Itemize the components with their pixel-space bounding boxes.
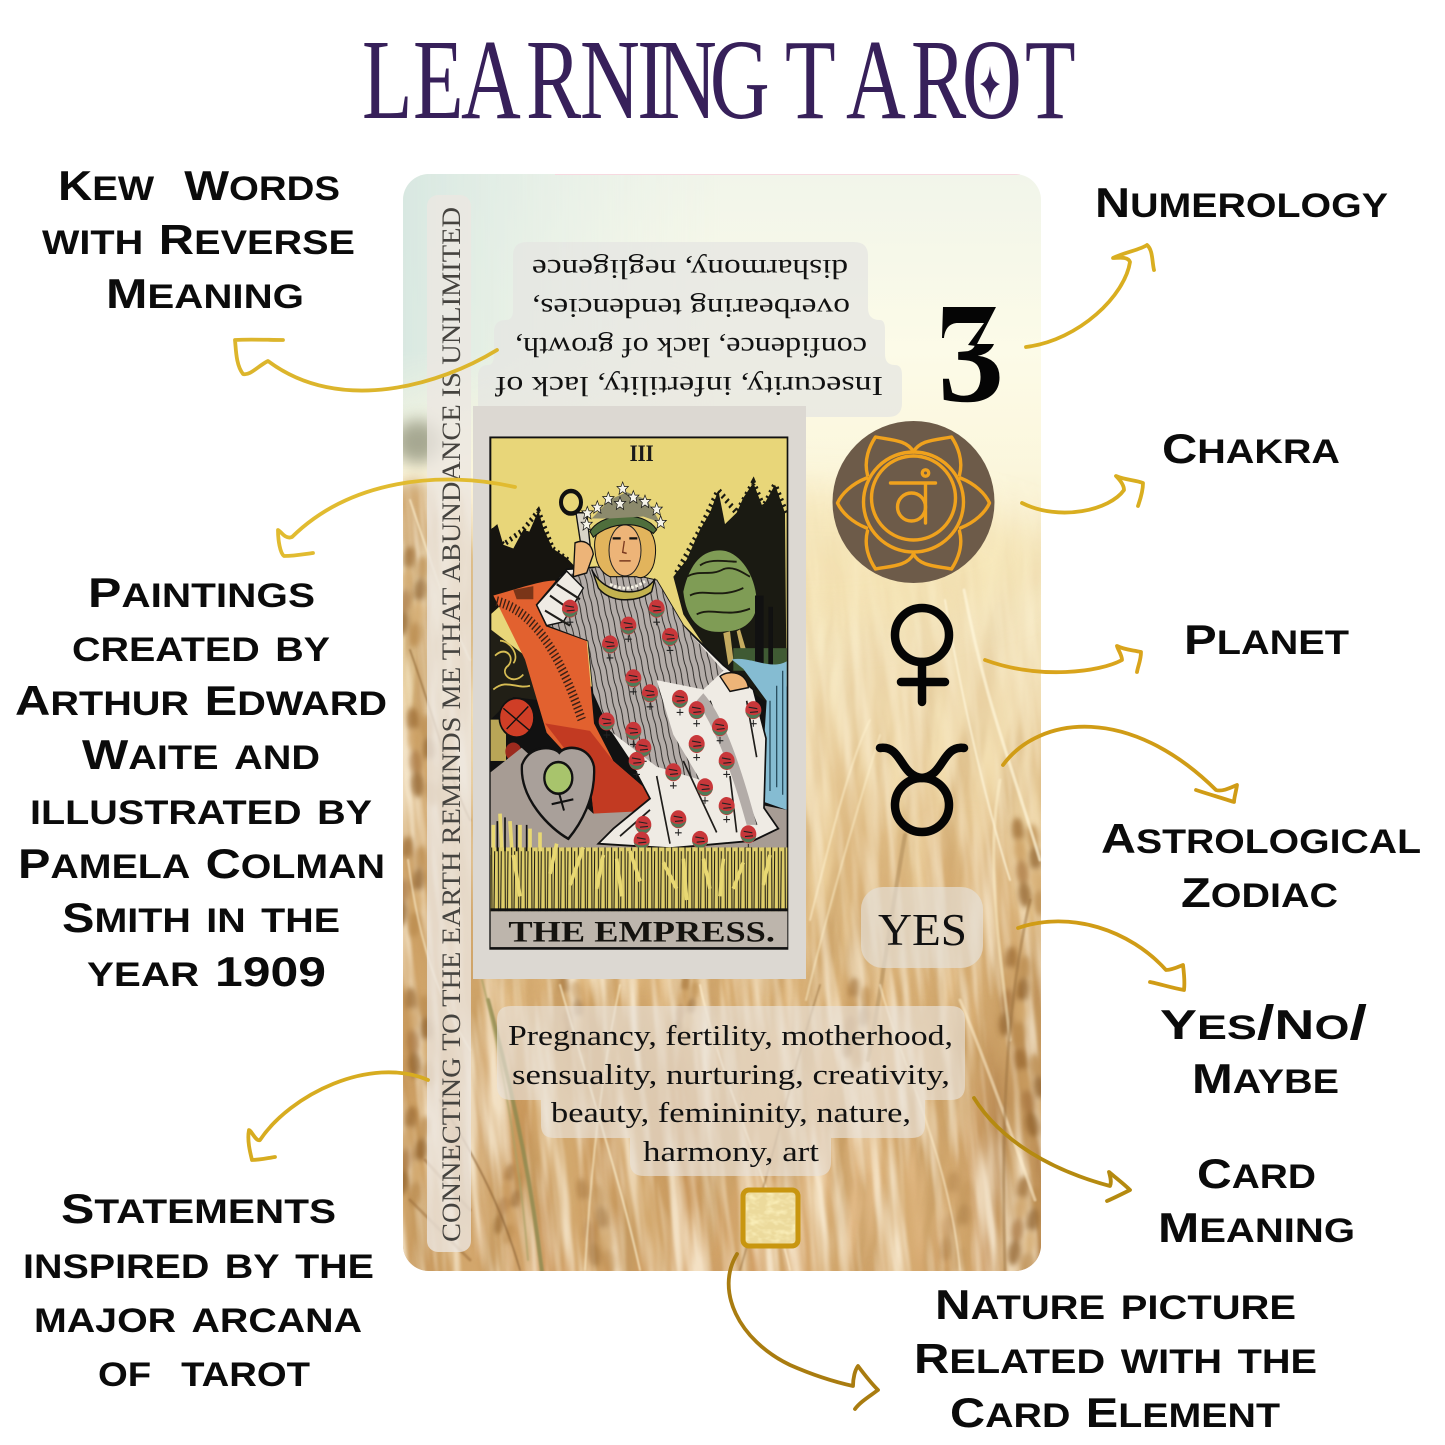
painting: The Empress: THE EMPRESS. bbox=[508, 915, 775, 948]
reversed keywords box: disharmony, negligence bbox=[532, 254, 848, 284]
label: statements: major arcana bbox=[34, 1290, 362, 1343]
yes/no answer box bbox=[861, 887, 983, 968]
arrow: astrological zodiac bbox=[1003, 727, 1237, 802]
label: statements bbox=[23, 1181, 374, 1397]
label: astrological zodiac bbox=[1101, 811, 1421, 918]
arrow: chakra bbox=[1022, 476, 1143, 513]
icon: numerology number 3 bbox=[942, 307, 1000, 402]
label: nature picture bbox=[914, 1277, 1317, 1438]
reversed keywords box bbox=[478, 242, 902, 417]
robe bbox=[537, 567, 778, 848]
throne bbox=[490, 630, 537, 719]
label: yes no maybe: Yes/ No/ bbox=[1160, 997, 1367, 1050]
label: key words: Meaning bbox=[106, 266, 304, 319]
label: statements: Statements bbox=[61, 1181, 336, 1234]
label: nature picture: Card Element bbox=[950, 1385, 1280, 1438]
label: paintings: Paintings bbox=[88, 565, 315, 618]
label: yes no maybe bbox=[1160, 997, 1367, 1104]
icon: numerology number 3: 3 bbox=[938, 283, 1004, 430]
label: card meaning bbox=[1158, 1146, 1355, 1253]
robe flowers bbox=[642, 684, 658, 710]
label: paintings: created by bbox=[72, 619, 330, 672]
painting: The Empress: III bbox=[630, 440, 654, 466]
label: astrological zodiac: Astrological bbox=[1101, 811, 1421, 864]
label: paintings: Pamela Colman bbox=[18, 836, 385, 889]
label: paintings: Arthur Edward bbox=[15, 673, 387, 726]
label: astrological zodiac: Zodiac bbox=[1181, 865, 1338, 918]
card meaning box: harmony, art bbox=[643, 1136, 819, 1168]
reversed keywords box: overbearing tendencies, bbox=[532, 293, 850, 323]
wheat bbox=[491, 847, 787, 911]
arrow: key words bbox=[235, 340, 497, 391]
crown bbox=[590, 516, 657, 537]
wheat ears bbox=[393, 546, 1056, 1278]
reversed keywords box: confidence, lack of growth, bbox=[515, 332, 867, 362]
yes/no answer box: YES bbox=[878, 905, 967, 955]
arrow: numerology bbox=[1026, 245, 1154, 347]
painting: The Empress bbox=[489, 436, 788, 950]
label: key words: Kew Words bbox=[58, 158, 340, 211]
label: paintings: illustrated by bbox=[30, 782, 372, 835]
label: paintings bbox=[15, 565, 387, 997]
label: nature picture: Nature picture bbox=[935, 1277, 1296, 1330]
icon: Taurus zodiac bbox=[880, 748, 964, 832]
panel: tarot reference card bbox=[403, 174, 1041, 1271]
label: chakra: Chakra bbox=[1162, 421, 1340, 474]
icon: sacral chakra bbox=[832, 421, 994, 583]
label: planet: Planet bbox=[1184, 612, 1349, 665]
label: key words bbox=[42, 158, 355, 319]
sceptre and hand bbox=[576, 513, 591, 550]
arrow: planet bbox=[985, 646, 1141, 672]
arrow: nature picture bbox=[729, 1254, 878, 1409]
card meaning box: beauty, femininity, nature, bbox=[551, 1097, 911, 1129]
statement text strip: CONNECTING TO THE EARTH REMINDS ME THAT ABUNDANCE IS UNLIMITED bbox=[437, 207, 466, 1242]
trees bbox=[491, 512, 574, 614]
label: card meaning: Meaning bbox=[1158, 1200, 1355, 1253]
label: key words: with Reverse bbox=[42, 212, 355, 265]
reversed keywords box: Insecurity, infertility, lack of bbox=[495, 371, 883, 401]
card meaning box: Pregnancy, fertility, motherhood, bbox=[508, 1020, 953, 1052]
label: paintings: year 1909 bbox=[87, 944, 326, 997]
arrow: statements bbox=[248, 1072, 428, 1160]
card caption bbox=[491, 911, 787, 947]
arrow: paintings bbox=[278, 480, 515, 556]
arrow: card meaning bbox=[974, 1098, 1130, 1201]
arrow: yes no maybe bbox=[1018, 921, 1184, 990]
label: statements: of tarot bbox=[98, 1344, 310, 1397]
label: card meaning: Card bbox=[1197, 1146, 1316, 1199]
label: yes no maybe: Maybe bbox=[1192, 1051, 1339, 1104]
element gold square bbox=[743, 1190, 798, 1246]
statement text strip bbox=[427, 195, 471, 1252]
ground and shield bbox=[491, 748, 787, 866]
card meaning box bbox=[497, 1006, 965, 1176]
title: LEARNING TAROT bbox=[362, 16, 1076, 143]
icon: Venus planet bbox=[895, 608, 949, 702]
card meaning box: sensuality, nurturing, creativity, bbox=[512, 1059, 950, 1091]
card frame bbox=[473, 406, 806, 979]
label: paintings: Waite and bbox=[82, 727, 320, 780]
label: paintings: Smith in the bbox=[62, 890, 340, 943]
queen head bbox=[595, 518, 656, 578]
label: nature picture: Related with the bbox=[914, 1331, 1317, 1384]
label: statements: inspired by the bbox=[23, 1236, 374, 1289]
label: numerology: Numerology bbox=[1095, 175, 1388, 228]
nature picture: wheat field background bbox=[403, 174, 1041, 1271]
